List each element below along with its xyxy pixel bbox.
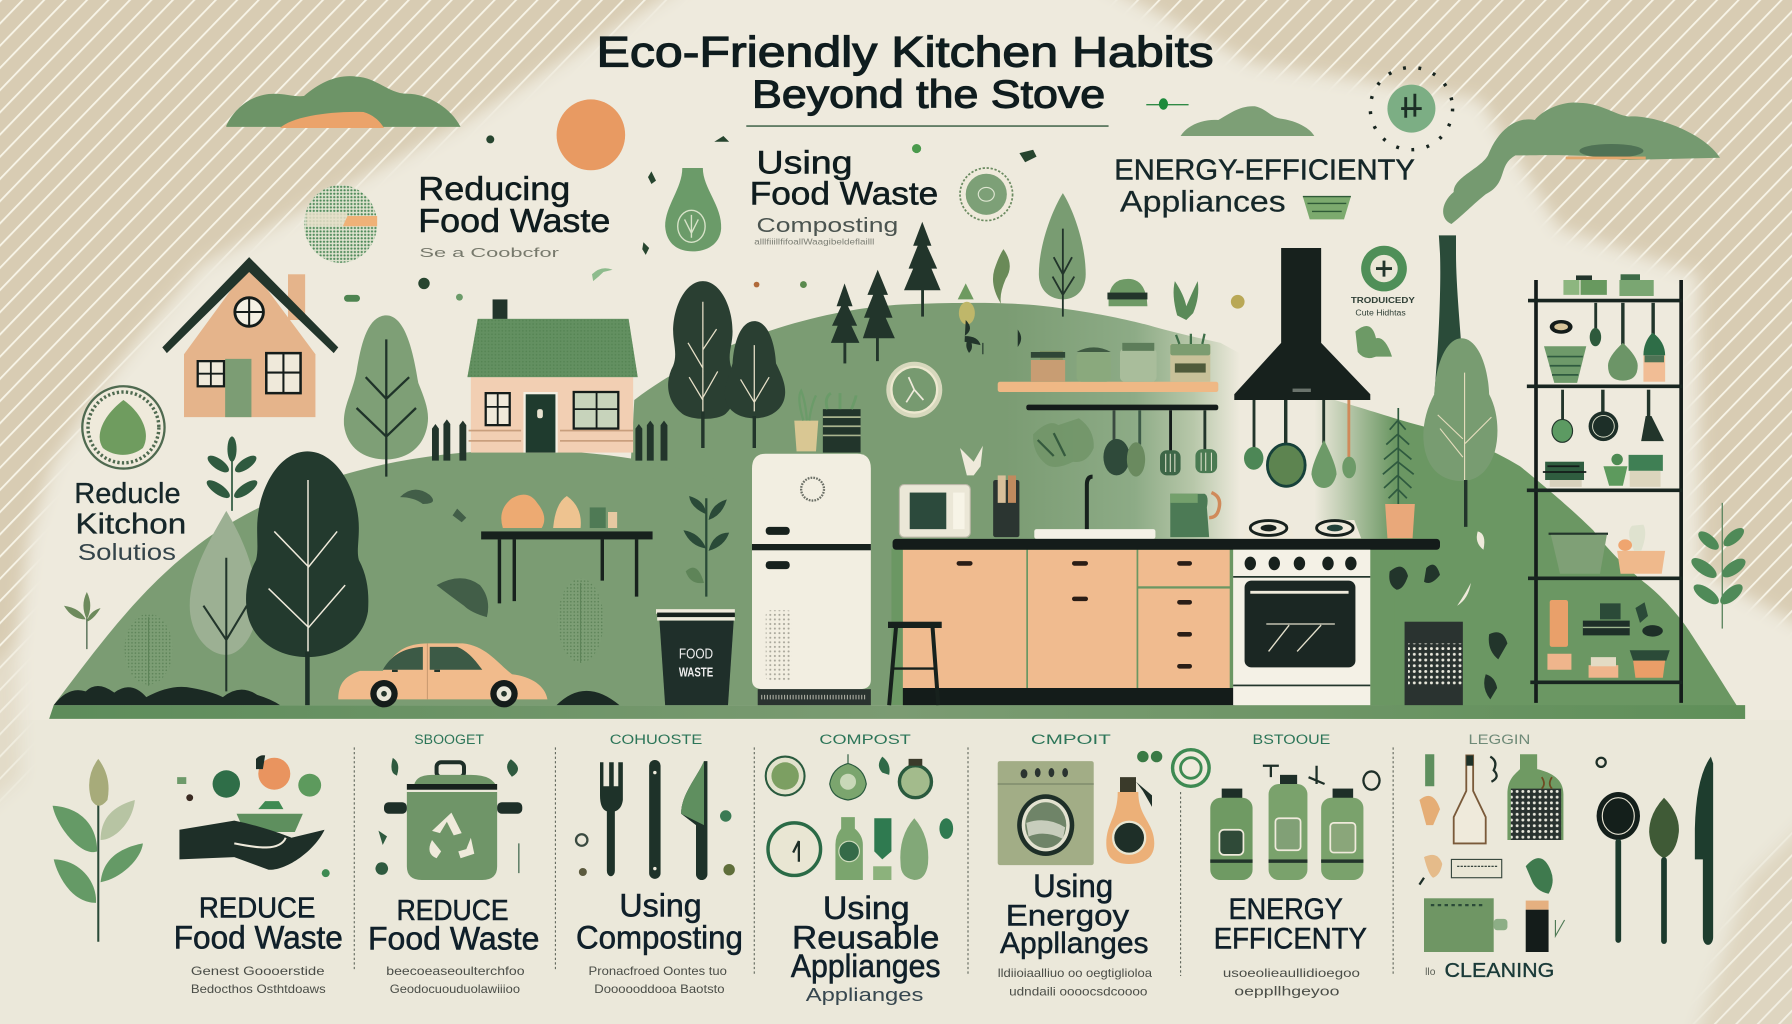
column text 5: lldiioiaalliuo oo oegtiglioloa [998, 966, 1152, 980]
ground strip [49, 705, 1745, 719]
column text 2: REDUCE [397, 895, 509, 927]
wall shelf with jars [998, 334, 1218, 392]
title underline [746, 125, 1109, 127]
pine center [904, 222, 941, 317]
column text 4: Using [823, 890, 910, 926]
fourth shelf items [1549, 525, 1665, 574]
icon: washing machine [998, 761, 1094, 865]
column text 5 [998, 868, 1152, 998]
shelf unit [1527, 274, 1682, 703]
hill front [54, 450, 800, 705]
dotted globe [304, 185, 377, 263]
heading: using food waste [750, 145, 938, 212]
title: Eco-Friendly Kitchen Habits [597, 28, 1214, 75]
column text 7: llo [1425, 967, 1436, 978]
icon: pan, spoon, knife [1597, 757, 1713, 945]
bottom: column labels: SBOOGET [414, 732, 485, 747]
column text 1: Bedocthos Osthtdoaws [191, 982, 326, 996]
hill under counter [891, 549, 1394, 705]
icon: cutlery [576, 760, 735, 880]
bottom: column labels: BSTOOUE [1253, 732, 1330, 747]
icon: three bottles [1210, 775, 1363, 880]
utensil rail [960, 405, 1218, 477]
fridge [752, 454, 871, 705]
oven [1233, 550, 1370, 705]
bottom: column labels: COHUOSTE [610, 732, 702, 747]
tree green center [1039, 193, 1086, 317]
bottom: column labels: COMPOST [819, 732, 912, 747]
cleaning tools [1419, 754, 1606, 843]
leaf branch right [1688, 503, 1749, 629]
column text 2: Food Waste [368, 921, 539, 957]
hill right [1314, 394, 1745, 719]
food waste bin [656, 609, 735, 705]
second shelf items [1544, 303, 1665, 383]
icon: spray bottle [1106, 751, 1162, 864]
column text 4 [791, 890, 941, 1005]
column text 5: Using [1033, 868, 1113, 904]
car [338, 643, 547, 707]
column text 3: Composting [576, 920, 743, 956]
plant next to bin [683, 496, 729, 597]
heading: reducing food waste: Reducing [418, 171, 570, 208]
stool [888, 622, 942, 705]
heading: reduce kitchen solutions: Solutios [78, 539, 176, 565]
big dark tree [246, 451, 368, 705]
caption: emblem [1351, 296, 1416, 317]
heading: energy-efficiency appliances: ENERGY-EFFICIENTY [1114, 154, 1415, 186]
medium tree behind [190, 511, 257, 691]
heading: reduce kitchen solutions [74, 478, 186, 565]
small plant far left [64, 592, 101, 649]
fifth shelf items [1547, 600, 1670, 678]
heading: reduce kitchen solutions: Reducle [74, 478, 181, 510]
icon: compost pot [376, 759, 522, 880]
small plants around center [958, 249, 1245, 354]
column text 3: Using [619, 888, 702, 924]
vase [665, 168, 721, 251]
small divider ornament [1146, 98, 1189, 110]
scattered small icons top [344, 135, 1037, 302]
column text 5: Energoy [1006, 900, 1129, 933]
caption: emblem: TRODUICEDY [1351, 296, 1416, 305]
smoke and cloud right [1443, 103, 1720, 224]
column text 6: EFFICENTY [1214, 923, 1367, 956]
column text 4: Reusable [792, 920, 939, 956]
kitchen counter and cabinets [893, 539, 1440, 705]
badge: green emblem [1361, 246, 1407, 291]
hood [1234, 248, 1370, 400]
tree right [1423, 338, 1497, 527]
badge: left leaf emblem [82, 386, 165, 469]
icon: herb bundle [1355, 326, 1392, 358]
plant left of tree [204, 437, 260, 511]
title [597, 28, 1214, 116]
column text 2: Geodocuouduolawiiioo [390, 982, 520, 996]
icon: reusable set [766, 754, 953, 880]
hills [54, 303, 1745, 719]
column text 7: CLEANING [1445, 959, 1554, 982]
food waste bin: FOOD [679, 646, 713, 662]
table with food [481, 495, 653, 603]
fence [432, 419, 667, 461]
heading: energy-efficiency appliances: Appliances [1120, 185, 1286, 218]
counter objects [899, 475, 1361, 539]
subheading: composting: Composting [757, 214, 898, 237]
dark trees pair [668, 281, 785, 448]
heading: reducing food waste [418, 171, 610, 240]
utensils under hood [1244, 400, 1356, 488]
column text 3: Doooooddooa Baotsto [594, 982, 725, 996]
column text 6 [1214, 893, 1367, 998]
column text 4: Applianges [806, 984, 923, 1005]
top shelf boxes [1563, 274, 1654, 296]
caption: emblem: Cute Hidhtas [1355, 308, 1406, 317]
clock badge [886, 362, 942, 418]
cloud left [226, 76, 461, 128]
plants pot on hill [794, 391, 861, 453]
small icons above bottles [1263, 766, 1379, 790]
column text 5: udndaili oooocsdcoooo [1009, 984, 1148, 998]
plants near speaker [1389, 531, 1507, 699]
heading: using food waste: Food Waste [750, 176, 938, 212]
heading: energy-efficiency appliances [1114, 154, 1415, 218]
title: Beyond the Stove [752, 73, 1105, 116]
column text 3: Pronacfroed Oontes tuo [589, 964, 727, 978]
subheading: composting: alllfiiillfifoallWaagibeldeflailll [754, 238, 875, 247]
tools lower row [1419, 855, 1565, 952]
third shelf items [1543, 390, 1664, 487]
chimney [1434, 235, 1463, 394]
column text 2 [368, 895, 539, 996]
bottom: column labels: CMPOIT [1031, 732, 1112, 747]
icon: hand holding food [177, 755, 330, 877]
column text 1: REDUCE [199, 893, 315, 925]
column text 2: beecoeaseoulterchfoo [386, 964, 525, 978]
caption: reducing: Se a Coobcfor [419, 246, 559, 260]
icon: leaf plant [53, 759, 143, 942]
heading: reducing food waste: Food Waste [418, 203, 610, 240]
faint dotted trees [125, 578, 603, 686]
hill back [617, 303, 1246, 705]
column text 4: Applianges [791, 948, 941, 984]
tree medium [344, 315, 428, 477]
column text 6: usoeolieaullidioegoo [1223, 966, 1360, 980]
speaker bin [1405, 622, 1463, 705]
icon: basket [1303, 197, 1351, 219]
bottom: column labels: LEGGIN [1469, 732, 1530, 747]
heading: reduce kitchen solutions: Kitchon [75, 509, 186, 541]
column text 1 [174, 893, 343, 996]
column text 6: ENERGY [1229, 893, 1343, 926]
badge: top right [1370, 67, 1453, 150]
column text 3 [576, 888, 743, 996]
sun [557, 99, 625, 170]
column text 1: Food Waste [174, 920, 343, 956]
badge: bottom energy [1173, 750, 1209, 786]
house green roof [467, 299, 638, 453]
column dividers [354, 747, 1393, 976]
pines pair [831, 270, 895, 363]
food waste bin: WASTE [679, 666, 713, 680]
ground mounds [54, 686, 619, 705]
column text 1: Genest Goooerstide [191, 964, 325, 978]
subheading: composting [754, 214, 898, 247]
bottom: column labels [414, 732, 1530, 747]
badge: composting [960, 168, 1013, 221]
column text 5: Appllanges [1000, 927, 1149, 960]
heading: using food waste: Using [757, 145, 853, 181]
column text 6: oeppllhgeyoo [1234, 983, 1339, 998]
cloud small [1181, 106, 1314, 136]
dark blobs on hill [400, 490, 488, 617]
potted pine [1383, 408, 1415, 538]
house left [162, 257, 338, 417]
